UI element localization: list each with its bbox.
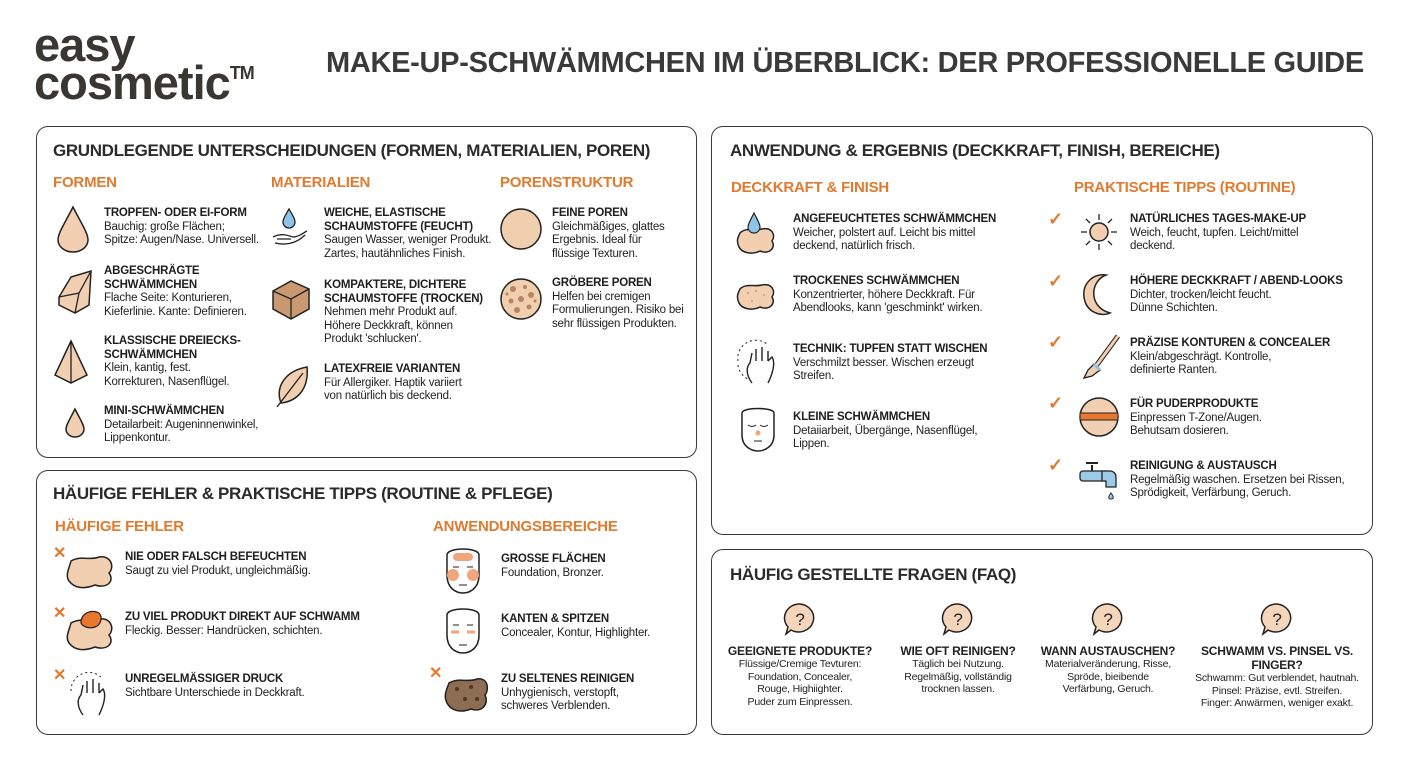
icon: dabbing hand	[734, 339, 780, 385]
icon: face large areas	[446, 548, 480, 594]
faq 2: WIE OFT REINIGEN?	[900, 644, 1016, 658]
faq 1: GEEIGNETE PRODUKTE?	[728, 644, 872, 658]
icon: drop	[57, 206, 89, 253]
text	[501, 673, 634, 712]
item: kompakt: Nehmen mehr Produkt auf.	[324, 306, 457, 318]
tip 2: ✓	[1048, 271, 1063, 291]
icon: cube	[272, 280, 310, 320]
item: dreieck: SCHWÄMMCHEN	[104, 348, 197, 360]
item: kleine: Detaiiarbeit, Übergänge, Nasenflügel,	[793, 424, 977, 436]
logo: easy	[34, 18, 135, 71]
error 3: ✕	[53, 667, 66, 684]
item: tropfen	[104, 207, 259, 246]
icon: question bubble	[1260, 602, 1294, 636]
item: tropfen: Bauchig: große Flächen;	[104, 220, 225, 232]
item: tropfen: Spitze: Augen/Nase. Universell.	[104, 234, 259, 246]
item: mini: Detailarbeit: Augeninnenwinkel,	[104, 418, 258, 430]
item: tropfen: TROPFEN- ODER EI-FORM	[104, 207, 247, 219]
item: feine poren	[552, 207, 665, 260]
text	[1130, 460, 1344, 500]
logo	[34, 18, 254, 109]
text: REINIGUNG & AUSTAUSCH	[1130, 460, 1277, 472]
panel: anwendung & ergebnis	[711, 126, 1373, 535]
text	[125, 551, 311, 576]
item: trocken: TROCKENES SCHWÄMMCHEN	[793, 275, 959, 287]
faq 3: Spröde, bieibende	[1067, 670, 1149, 682]
item: latexfrei: Für Allergiker. Haptik variiert	[324, 376, 462, 388]
item: feine poren: flüssige Texturen.	[552, 248, 638, 260]
icon: leaf	[276, 366, 308, 407]
icon: powder puff	[1078, 395, 1120, 439]
item: angefeuchtet: Weicher, polstert auf. Leicht bis mittel	[793, 226, 975, 238]
faq 4: Schwamm: Gut verblendet, hautnah.	[1195, 672, 1359, 684]
icon: sponge with product	[66, 610, 112, 650]
item: dreieck: Klein, kantig, fest.	[104, 362, 191, 374]
text: Regelmäßig waschen. Ersetzen bei Rissen,	[1130, 474, 1344, 486]
icon: brush	[1080, 334, 1122, 380]
faq 3: Materialveränderung, Risse,	[1045, 658, 1171, 670]
heading: HÄUFIGE FEHLER & PRAKTISCHE TIPPS (ROUTINE & PFLEGE)	[53, 484, 552, 503]
panel: fehler & tipps	[36, 470, 697, 735]
item: feine poren: Ergebnis. Ideal für	[552, 234, 642, 246]
tip 2	[1048, 271, 1368, 321]
faq 1: Puder zum Einpressen.	[748, 696, 852, 708]
item: trocken: Konzentrierter, höhere Deckkraft. Für	[793, 288, 975, 300]
text: NIE ODER FALSCH BEFEUCHTEN	[125, 551, 306, 563]
subheading: porenstruktur: PORENSTRUKTUR	[500, 174, 633, 191]
text: Dünne Schichten.	[1130, 302, 1218, 314]
item: kompakt: Höhere Deckkraft, können	[324, 320, 453, 332]
faq 2: Regelmäßig, vollständig	[904, 670, 1012, 682]
text	[501, 552, 606, 578]
item: weich	[324, 207, 491, 260]
faq 1: Rouge, Highiighter.	[757, 683, 843, 695]
subheading: tipps: PRAKTISCHE TIPPS (ROUTINE)	[1074, 179, 1295, 196]
icon: dirty sponge	[444, 678, 488, 712]
faq 2: trocknen lassen.	[921, 683, 995, 695]
title: MAKE-UP-SCHWÄMMCHEN IM ÜBERBLICK: DER PROFESSIONELLE GUIDE	[326, 47, 1364, 79]
subheading: deckkraft: DECKKRAFT & FINISH	[731, 179, 889, 196]
subheading: formen: FORMEN	[53, 174, 117, 191]
heading: HÄUFIG GESTELLTE FRAGEN (FAQ)	[730, 565, 1016, 584]
error 1	[53, 545, 311, 588]
item: technik: Streifen.	[793, 370, 834, 382]
subheading: fehler: HÄUFIGE FEHLER	[55, 518, 184, 535]
item: grobe poren: Formulierungen. Risiko bei	[552, 304, 684, 316]
faq 4: Finger: Anwärmen, weniger exakt.	[1201, 697, 1353, 709]
item: angefeuchtet: ANGEFEUCHTETES SCHWÄMMCHEN	[793, 213, 996, 225]
text: Foundation, Bronzer.	[501, 566, 604, 578]
text: Concealer, Kontur, Highlighter.	[501, 626, 650, 638]
icon: question bubble	[941, 602, 975, 636]
text: NATÜRLICHES TAGES-MAKE-UP	[1130, 213, 1306, 225]
item: dreieck: Korrekturen, Nasenflügel.	[104, 376, 229, 388]
text: UNREGELMÄSSIGER DRUCK	[125, 673, 283, 685]
faq 3	[1030, 602, 1186, 696]
text	[1130, 398, 1262, 438]
area 1	[446, 548, 606, 594]
item: grobe poren	[552, 276, 684, 330]
text: KANTEN & SPITZEN	[501, 613, 609, 625]
item: mini: Lippenkontur.	[104, 432, 170, 444]
text: ZU SELTENES REINIGEN	[501, 673, 634, 685]
item: feine poren: Gleichmäßiges, glattes	[552, 220, 665, 232]
item: technik: Verschmilzt besser. Wischen erzeugt	[793, 356, 974, 368]
area 3: ✕	[429, 665, 442, 682]
item: mini	[104, 404, 258, 444]
item: grobe poren: GRÖBERE POREN	[552, 277, 652, 289]
error 2	[53, 605, 360, 650]
item: technik: TECHNIK: TUPFEN STATT WISCHEN	[793, 343, 987, 355]
icon: dry sponge	[736, 284, 774, 310]
icon: angled sponge	[58, 270, 92, 314]
text: HÖHERE DECKKRAFT / ABEND-LOOKS	[1130, 275, 1343, 287]
tip 4: ✓	[1048, 393, 1063, 413]
faq 1: Foundation, Concealer,	[748, 670, 852, 682]
item: trocken: Abendlooks, kann 'geschminkt' wirken.	[793, 302, 982, 314]
tip 3: ✓	[1048, 332, 1063, 352]
icon: hand with drop	[272, 208, 308, 245]
text: Dichter, trocken/leicht feucht.	[1130, 288, 1271, 300]
icon: question bubble	[1091, 602, 1125, 636]
item: latexfrei: von natürlich bis deckend.	[324, 390, 452, 402]
item: abgeschraegt: ABGESCHRÄGTE	[104, 265, 199, 277]
icon: question bubble: ?	[1272, 610, 1282, 629]
text: definierte Ranten.	[1130, 364, 1217, 376]
item: weich: Zartes, hautähnliches Finish.	[324, 248, 465, 260]
item: kompakt: Produkt 'schlucken'.	[324, 333, 422, 345]
subheading: bereiche: ANWENDUNGSBEREICHE	[433, 518, 618, 535]
item: technik	[793, 343, 987, 384]
text	[1130, 213, 1306, 254]
panel: faq	[711, 549, 1373, 735]
text: Saugt zu viel Produkt, ungleichmäßig.	[125, 564, 311, 576]
faq 4	[1186, 602, 1368, 710]
item: angefeuchtet	[793, 212, 996, 252]
text: Fleckig. Besser: Handrücken, schichten.	[125, 624, 322, 636]
faq 3: Verfärbung, Geruch.	[1063, 683, 1153, 695]
panel: grundlegende unterscheidungen	[36, 126, 697, 458]
text: Behutsam dosieren.	[1130, 425, 1229, 437]
text: ZU VIEL PRODUKT DIREKT AUF SCHWAMM	[125, 611, 360, 623]
text: FÜR PUDERPRODUKTE	[1130, 398, 1258, 410]
icon: pyramid	[54, 339, 88, 384]
item: dreieck: KLASSISCHE DREIECKS-	[104, 335, 241, 347]
tip 3	[1048, 332, 1368, 382]
item: trocken	[793, 275, 982, 316]
item: abgeschraegt	[104, 264, 247, 318]
text: PRÄZISE KONTUREN & CONCEALER	[1130, 337, 1330, 349]
tip 4	[1048, 393, 1368, 443]
faq 1: Flüssige/Cremige Tevturen:	[739, 658, 861, 670]
item: angefeuchtet: deckend, natürlich frisch.	[793, 240, 915, 252]
icon: wet sponge	[736, 212, 774, 254]
faq 4: FINGER?	[1251, 658, 1303, 672]
icon: fine pores	[500, 208, 542, 250]
item: kompakt: SCHAUMSTOFFE (TROCKEN)	[324, 292, 483, 304]
logo: cosmeticTM	[34, 56, 254, 109]
icon: question bubble: ?	[953, 610, 963, 629]
item: abgeschraegt: SCHWÄMMCHEN	[104, 278, 197, 290]
item: kompakt: KOMPAKTERE, DICHTERE	[324, 279, 466, 291]
text	[1130, 275, 1343, 316]
area 2	[446, 608, 650, 654]
icon: tap	[1078, 457, 1120, 503]
text	[501, 613, 650, 638]
tip 1	[1048, 209, 1368, 257]
icon: mini drop	[65, 408, 85, 438]
item: weich: WEICHE, ELASTISCHE	[324, 207, 446, 219]
text	[125, 611, 360, 636]
faq 4: SCHWAMM VS. PINSEL VS.	[1201, 644, 1353, 658]
item: dreieck	[104, 335, 241, 388]
icon: face edges	[446, 608, 480, 654]
text: Weich, feucht, tupfen. Leicht/mittel	[1130, 226, 1298, 238]
text	[1130, 337, 1330, 378]
text: deckend.	[1130, 240, 1175, 252]
icon: moon	[1082, 273, 1120, 317]
icon: sponge	[66, 556, 112, 588]
item: grobe poren: Helfen bei cremigen	[552, 290, 650, 302]
item: weich: Saugen Wasser, weniger Produkt.	[324, 234, 491, 246]
subheading: materialien: MATERIALIEN	[271, 174, 370, 191]
icon: question bubble: ?	[1103, 610, 1113, 629]
heading: GRUNDLEGENDE UNTERSCHEIDUNGEN (FORMEN, MATERIALIEN, POREN)	[53, 141, 650, 160]
item: feine poren: FEINE POREN	[552, 207, 628, 219]
tip 5	[1048, 455, 1368, 507]
text: Unhygienisch, verstopft,	[501, 686, 619, 698]
item: kleine	[793, 411, 977, 452]
faq 2: Täglich bei Nutzung.	[912, 658, 1004, 670]
item: weich: SCHAUMSTOFFE (FEUCHT)	[324, 220, 473, 232]
faq 1	[720, 602, 880, 708]
icon: question bubble: ?	[795, 610, 805, 629]
faq 2	[880, 602, 1036, 696]
faq 3: WANN AUSTAUSCHEN?	[1041, 644, 1175, 658]
icon: hand	[70, 672, 106, 716]
icon: coarse pores	[500, 278, 542, 320]
text: Sprödigkeit, Verfärbung, Geruch.	[1130, 487, 1291, 499]
text: Klein/abgeschrägt. Kontrolle,	[1130, 350, 1271, 362]
tip 1: ✓	[1048, 209, 1063, 229]
item: kompakt	[324, 279, 483, 345]
item: latexfrei: LATEXFREIE VARIANTEN	[324, 363, 460, 375]
item: kleine: Lippen.	[793, 438, 829, 450]
item: abgeschraegt: Flache Seite: Konturieren,	[104, 292, 232, 304]
text: GROSSE FLÄCHEN	[501, 553, 606, 565]
error 3	[53, 667, 304, 716]
item: latexfrei	[324, 363, 462, 402]
text: Einpressen T-Zone/Augen.	[1130, 412, 1262, 424]
text: Sichtbare Unterschiede in Deckkraft.	[125, 686, 304, 698]
icon: face	[740, 405, 776, 453]
text: schweres Verblenden.	[501, 700, 610, 712]
item: grobe poren: sehr flüssigen Produkten.	[552, 318, 677, 330]
item: mini: MINI-SCHWÄMMCHEN	[104, 405, 224, 417]
error 2: ✕	[53, 605, 66, 622]
area 3	[429, 665, 634, 712]
icon: question bubble	[783, 602, 817, 636]
heading: ANWENDUNG & ERGEBNIS (DECKKRAFT, FINISH, BEREICHE)	[730, 141, 1220, 160]
faq 4: Pinsel: Präzise, evtl. Streifen.	[1212, 684, 1342, 696]
error 1: ✕	[53, 545, 66, 562]
tip 5: ✓	[1048, 455, 1063, 475]
icon: sun	[1078, 211, 1120, 253]
item: abgeschraegt: Kieferlinie. Kante: Definieren.	[104, 306, 247, 318]
text	[125, 672, 304, 698]
item: kleine: KLEINE SCHWÄMMCHEN	[793, 411, 930, 423]
